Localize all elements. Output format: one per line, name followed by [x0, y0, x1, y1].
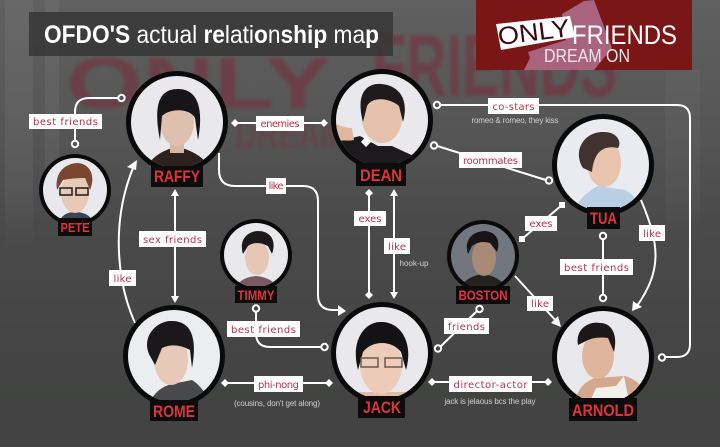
- connector: best friends Pete-Raffy: best friends: [33, 117, 98, 128]
- ghost logo watermark: DREAM: [235, 113, 345, 157]
- connector: enemies: enemies: [260, 119, 300, 130]
- connector: exes Dean-Jack: [354, 189, 386, 299]
- portrait: Rome: [123, 305, 225, 421]
- connector: roommates: roommates: [463, 156, 518, 167]
- connector: co-stars: [434, 98, 690, 361]
- note: romeo & romeo: romeo & romeo, they kiss: [472, 116, 558, 125]
- portrait: Tua: [552, 114, 654, 229]
- connector: like Boston-Arnold: [515, 276, 561, 327]
- connector: like Tua-Arnold: [632, 200, 665, 311]
- name tag: Pete: PETE: [60, 220, 90, 235]
- connector: roommates: [431, 142, 552, 184]
- portrait: Boston: [447, 220, 519, 304]
- connector: exes Dean-Jack: exes: [358, 214, 382, 225]
- ghost logo watermark: [66, 16, 617, 157]
- portrait: Arnold: [552, 306, 654, 421]
- connector: best friends Pete-Raffy: [29, 95, 125, 147]
- title banner: OFDO'S actual relationship map: [44, 21, 379, 49]
- connector: director-actor: director-actor: [454, 380, 528, 391]
- connector: exes Tua-Boston: exes: [530, 219, 552, 230]
- connector: like Dean-Jack: like: [388, 242, 406, 253]
- connector: friends: [435, 306, 489, 352]
- connector: enemies: [231, 116, 328, 131]
- connector: exes Tua-Boston: [519, 202, 565, 242]
- name tag: Dean: DEAN: [360, 166, 402, 185]
- portrait: Pete: [39, 154, 111, 236]
- show logo: ONLY: [496, 14, 572, 51]
- connector: best friends Timmy-Jack: [227, 305, 328, 350]
- name tag: Boston: BOSTON: [458, 287, 508, 303]
- show logo: FRIENDS: [572, 20, 677, 50]
- connector: best friends Tua-Arnold: [560, 233, 633, 301]
- name tag: Rome: ROME: [153, 402, 195, 421]
- connector: phi-nong: [221, 376, 333, 392]
- connector: sex friends: [139, 189, 206, 303]
- connector: sex friends: sex friends: [143, 235, 202, 246]
- connector: like Boston-Arnold: like: [531, 299, 549, 310]
- connector: co-stars: co-stars: [492, 102, 534, 113]
- connector: phi-nong: phi-nong: [258, 380, 299, 391]
- connector: friends: friends: [448, 322, 485, 333]
- connector: best friends Timmy-Jack: best friends: [231, 325, 296, 336]
- name tag: Tua: TUA: [590, 209, 617, 228]
- connector: like Raffy to Jack: [219, 153, 346, 316]
- show logo: DREAM ON: [544, 46, 630, 66]
- connector: director-actor: [428, 376, 552, 392]
- note: jack is jealous: jack is jelaous bcs the play: [444, 397, 536, 406]
- name tag: Jack: JACK: [363, 398, 402, 417]
- ghost logo watermark: ONLY: [66, 44, 331, 124]
- note: cousins: (cousins, don't get along): [234, 399, 320, 408]
- connector: like Tua-Arnold: like: [643, 229, 661, 240]
- connector: like Rome to Raffy: like: [114, 274, 132, 285]
- connector: like Rome to Raffy: [109, 160, 137, 323]
- portrait: Raffy: [126, 71, 228, 187]
- name tag: Timmy: TIMMY: [238, 287, 275, 303]
- connector: like Raffy to Jack: like: [268, 181, 284, 192]
- portrait: Dean: [331, 69, 433, 186]
- connector: like Dean-Jack: [384, 189, 410, 299]
- name tag: Arnold: ARNOLD: [572, 401, 634, 420]
- connector: best friends Tua-Arnold: best friends: [564, 263, 629, 274]
- title banner: [29, 12, 393, 56]
- portrait: Timmy: [220, 219, 292, 303]
- name tag: Raffy: RAFFY: [154, 167, 201, 186]
- show logo: [476, 0, 692, 70]
- portrait: Jack: [331, 302, 433, 418]
- note: hook-up: hook-up: [400, 259, 429, 268]
